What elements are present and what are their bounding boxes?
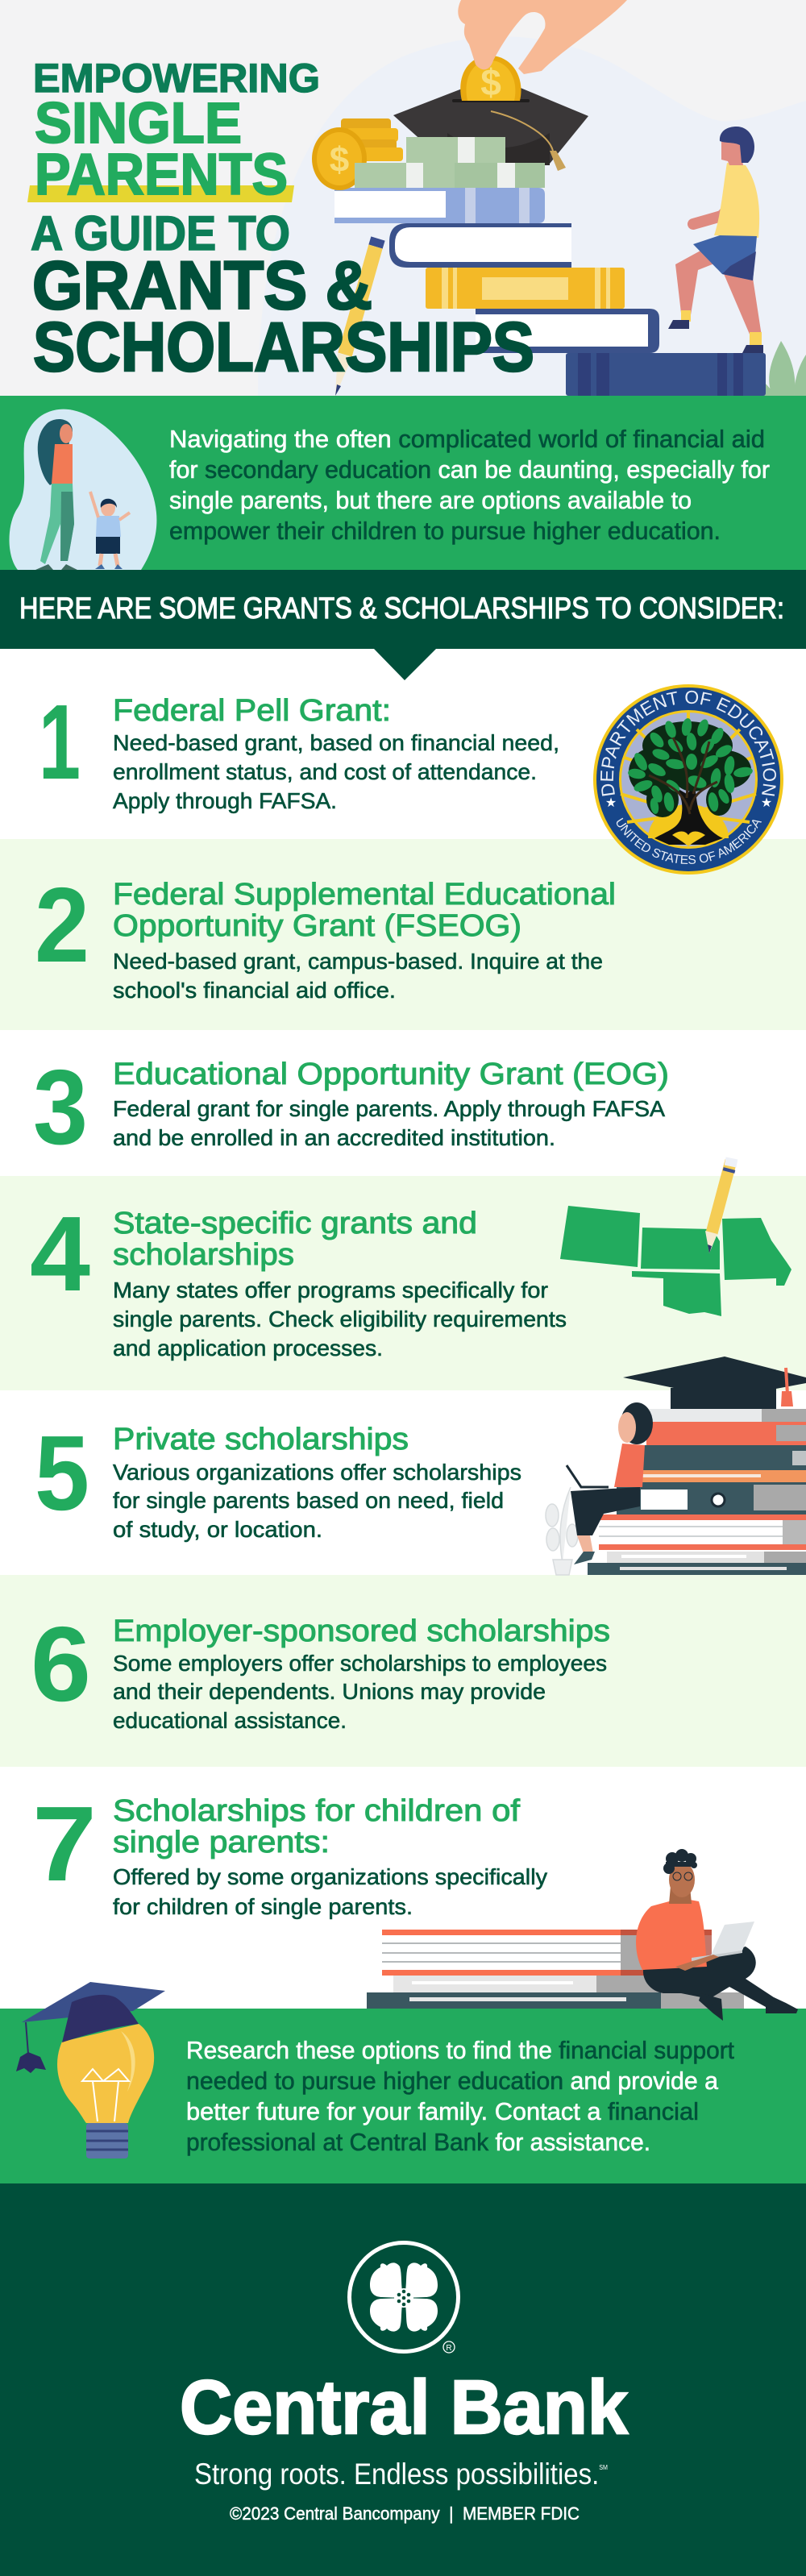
intro text: Navigating the often complicated world of financial aid <box>169 425 765 453</box>
icon: Department of Education seal <box>593 684 783 875</box>
intro text: for secondary education can be daunting, especially for <box>169 455 770 484</box>
icon: coin stack <box>312 118 403 190</box>
item 3: EOG <box>33 1048 669 1166</box>
title <box>27 56 534 386</box>
item 7: children of single parents: 7 <box>32 1785 97 1903</box>
item 5: private scholarships: of study, or location. <box>113 1517 322 1542</box>
tagline: Strong roots. Endless possibilities. <box>194 2458 648 2491</box>
item 7: children of single parents <box>32 1785 547 1919</box>
item 6: employer-sponsored: and their dependents. Unions may provide <box>113 1679 546 1704</box>
title: SCHOLARSHIPS <box>33 309 534 386</box>
icon: plant <box>750 341 806 396</box>
closing text: needed to pursue higher education and provide a <box>186 2067 719 2095</box>
title: A GUIDE TO <box>31 206 290 260</box>
icon: hand dropping coin <box>458 0 627 74</box>
copyright line: ©2023 Central Bancompany | MEMBER FDIC <box>230 2503 580 2524</box>
title: GRANTS & <box>32 247 372 323</box>
illustration: mother and child <box>10 409 156 570</box>
item 4: state-specific grants: 4 <box>30 1195 90 1313</box>
icon: coin: $ <box>480 61 501 103</box>
item 2: FSEOG: 2 <box>35 866 89 984</box>
item 2: FSEOG <box>35 866 616 1003</box>
icon: Department of Education seal: UNITED STATES OF AMERICA <box>616 817 762 864</box>
intro text <box>169 425 770 545</box>
item 6: employer-sponsored: educational assistance. <box>113 1708 347 1733</box>
item 5: private scholarships <box>35 1414 521 1542</box>
item 7: children of single parents: Scholarships for children of <box>113 1794 520 1828</box>
closing text: Research these options to find the financial support <box>186 2036 734 2064</box>
icon: climbing child <box>668 127 763 353</box>
icon: graduation cap piggy bank <box>393 77 588 171</box>
brand name: Central Bank <box>180 2365 628 2450</box>
intro text: empower their children to pursue higher education. <box>169 517 721 545</box>
panel: section heading <box>0 570 806 680</box>
item 4: state-specific grants: single parents. Check eligibility requirements <box>113 1307 567 1332</box>
closing text: better future for your family. Contact a financial <box>186 2097 699 2125</box>
illustration: woman on book stack <box>546 1357 806 1575</box>
icon: Department of Education seal: ★ <box>605 796 617 810</box>
item 4: state-specific grants: State-specific grants and <box>113 1207 477 1240</box>
item 5: private scholarships: for single parents based on need, field <box>113 1488 504 1513</box>
item 5: private scholarships: 5 <box>35 1414 89 1532</box>
item 6: employer-sponsored: Employer-sponsored scholarships <box>113 1614 610 1648</box>
item 7: children of single parents: single parents: <box>113 1826 330 1859</box>
icon: coin stack: $ <box>330 140 349 180</box>
closing text: professional at Central Bank for assistance. <box>186 2128 650 2156</box>
tagline: SM <box>599 2464 608 2471</box>
item 1: Federal Pell Grant: Need-based grant, based on financial need, <box>113 730 559 755</box>
panel: backgrounds of list rows <box>0 839 806 1767</box>
item 5: private scholarships: Various organizations offer scholarships <box>113 1460 521 1485</box>
icon: coin <box>460 56 521 103</box>
item 4: state-specific grants: scholarships <box>113 1238 294 1272</box>
item 1: Federal Pell Grant: 1 <box>39 683 81 801</box>
item 1: Federal Pell Grant: Apply through FAFSA. <box>113 788 337 813</box>
panel: closing message <box>0 2009 806 2183</box>
item 7: children of single parents: for children of single parents. <box>113 1894 413 1919</box>
logo: dogwood flower in ring: R <box>446 2344 452 2353</box>
item 3: EOG: Federal grant for single parents. Apply through FAFSA <box>113 1096 665 1121</box>
logo: dogwood flower in ring <box>350 2242 458 2353</box>
title: EMPOWERING <box>33 56 320 101</box>
item 4: state-specific grants: Many states offer programs specifically for <box>113 1278 548 1303</box>
item 3: EOG: Educational Opportunity Grant (EOG) <box>113 1057 669 1091</box>
intro text: single parents, but there are options available to <box>169 486 692 514</box>
icon: Department of Education seal: ★ <box>761 796 772 810</box>
item 4: state-specific grants <box>30 1195 567 1361</box>
icon: plant <box>546 1487 578 1575</box>
item 3: EOG: 3 <box>33 1048 88 1166</box>
panel: hero <box>0 0 806 396</box>
item 7: children of single parents: Offered by some organizations specifically <box>113 1864 547 1889</box>
icon: pencil <box>335 225 381 396</box>
icon: Department of Education seal: DEPARTMENT OF EDUCATION <box>600 690 776 796</box>
item 2: FSEOG: Federal Supplemental Educational <box>113 878 616 912</box>
item 3: EOG: and be enrolled in an accredited institution. <box>113 1125 555 1150</box>
item 2: FSEOG: school's financial aid office. <box>113 978 396 1003</box>
icon: map of states with pencil <box>560 1158 791 1316</box>
item 1: Federal Pell Grant: enrollment status, and cost of attendance. <box>113 759 537 784</box>
item 5: private scholarships: Private scholarships <box>113 1423 409 1456</box>
item 6: employer-sponsored: 6 <box>31 1605 91 1723</box>
panel: footer <box>0 2183 806 2576</box>
icon: light bulb with graduation cap <box>16 1982 165 2158</box>
item 4: state-specific grants: and application processes. <box>113 1336 383 1361</box>
title: PARENTS <box>35 143 288 207</box>
yellow highlight bar <box>27 185 294 202</box>
illustration: man on books with laptop <box>367 1849 798 2021</box>
icon: money bundles <box>355 137 545 188</box>
item 2: FSEOG: Need-based grant, campus-based. Inquire at the <box>113 949 603 974</box>
item 2: FSEOG: Opportunity Grant (FSEOG) <box>113 909 521 943</box>
item 1: Federal Pell Grant: Federal Pell Grant: <box>113 694 391 728</box>
title: SINGLE <box>35 92 242 156</box>
item 6: employer-sponsored: Some employers offer scholarships to employees <box>113 1651 607 1676</box>
item 1: Federal Pell Grant <box>39 683 559 813</box>
item 6: employer-sponsored <box>31 1605 610 1733</box>
icon: book stack <box>334 188 766 396</box>
closing text <box>186 2036 734 2156</box>
panel: introduction <box>0 396 806 570</box>
